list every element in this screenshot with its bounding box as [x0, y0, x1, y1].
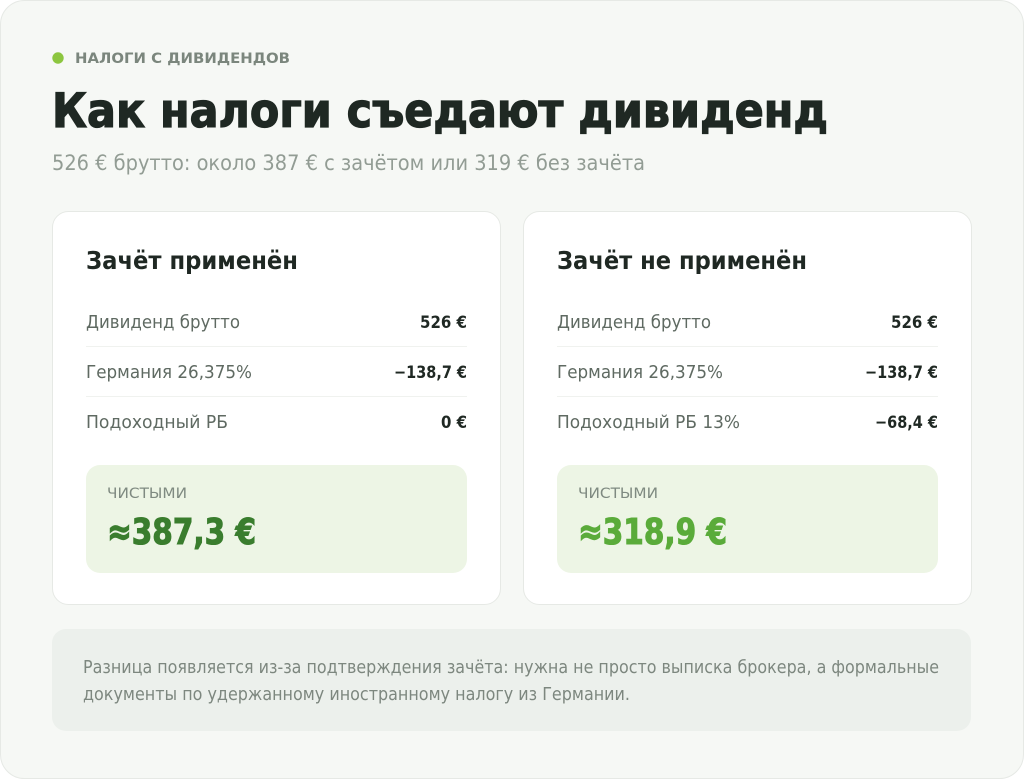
eyebrow: НАЛОГИ С ДИВИДЕНДОВ: [75, 51, 290, 67]
row: Germany: −138,7 €: [865, 363, 938, 383]
row: gross: Дивиденд брутто: [557, 313, 711, 333]
row: income tax: [86, 413, 467, 433]
note: [52, 629, 971, 731]
panel: credit applied: [52, 212, 500, 604]
subtitle: 526 € брутто: около 387 € с зачётом или 319 € без зачёта: [52, 151, 645, 175]
net result: [557, 465, 938, 573]
net result: [86, 465, 467, 573]
row: income tax: [557, 413, 938, 433]
row: income tax: Подоходный РБ: [86, 413, 228, 433]
row: Germany: −138,7 €: [394, 363, 467, 383]
row: income tax: 0 €: [441, 413, 467, 433]
card heading: Зачёт применён: [86, 246, 298, 275]
card heading: Зачёт не применён: [557, 246, 807, 275]
panel: credit not applied: [524, 212, 972, 604]
note: Разница появляется из-за подтверждения зачёта: нужна не просто выписка брокера, а формальные: [83, 658, 939, 678]
row: Germany: [557, 363, 938, 383]
net result: ≈318,9 €: [578, 512, 727, 553]
net result: ЧИСТЫМИ: [107, 486, 187, 502]
row: Germany: [86, 363, 467, 383]
net result: ≈387,3 €: [107, 512, 256, 553]
row: income tax: −68,4 €: [875, 413, 938, 433]
row: gross: [557, 313, 938, 333]
row: gross: Дивиденд брутто: [86, 313, 240, 333]
row: gross: [86, 313, 467, 333]
row: Germany: Германия 26,375%: [86, 363, 252, 383]
row: income tax: Подоходный РБ 13%: [557, 413, 740, 433]
row: gross: 526 €: [891, 313, 938, 333]
net result: ЧИСТЫМИ: [578, 486, 658, 502]
row: Germany: Германия 26,375%: [557, 363, 723, 383]
title: Как налоги съедают дивиденд: [52, 84, 828, 139]
row: gross: 526 €: [420, 313, 467, 333]
note: документы по удержанному иностранному налогу из Германии.: [83, 685, 630, 705]
